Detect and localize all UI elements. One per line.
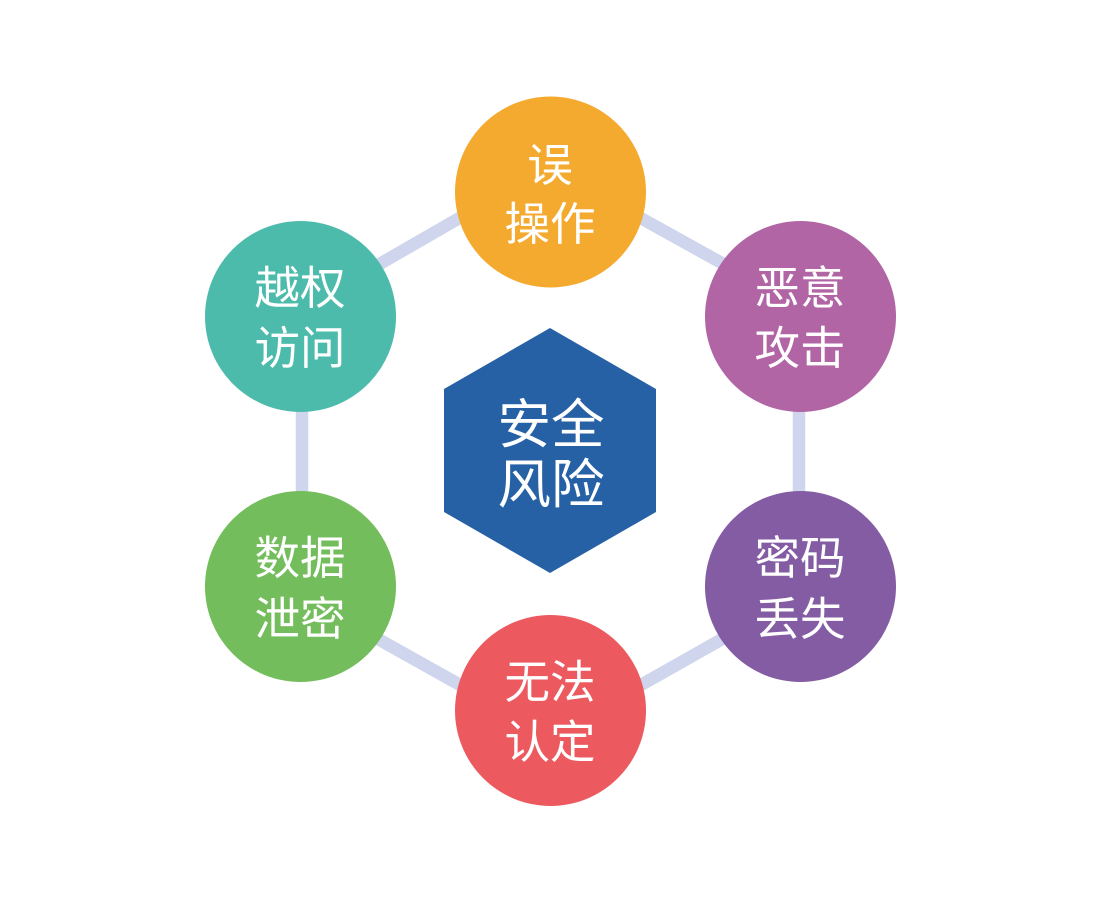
node: 误操作: 操作	[504, 199, 596, 250]
node: 越权访问	[205, 221, 396, 412]
node: 数据泄密	[205, 491, 396, 682]
center hexagon: 安全风险: 风险	[498, 456, 604, 515]
node: 误操作: 误	[527, 140, 573, 191]
center hexagon: 安全风险	[444, 328, 656, 573]
center hexagon: 安全风险: 安全	[498, 396, 604, 455]
node: 恶意攻击	[705, 221, 896, 412]
node: 密码丢失	[705, 491, 896, 682]
node: 数据泄密: 数据	[254, 533, 346, 584]
node: 无法认定: 无法	[504, 657, 596, 708]
node: 无法认定: 认定	[504, 717, 596, 768]
node: 数据泄密: 泄密	[254, 594, 346, 645]
node: 误操作	[455, 96, 646, 288]
node: 密码丢失: 丢失	[754, 594, 846, 645]
node: 恶意攻击: 恶意	[754, 263, 846, 314]
hexagon ring connectors	[302, 214, 799, 688]
node: 越权访问: 越权	[254, 263, 346, 314]
node: 无法认定	[455, 615, 646, 806]
node: 越权访问: 访问	[254, 323, 346, 374]
node: 恶意攻击: 攻击	[754, 323, 846, 374]
node: 密码丢失: 密码	[754, 533, 846, 584]
